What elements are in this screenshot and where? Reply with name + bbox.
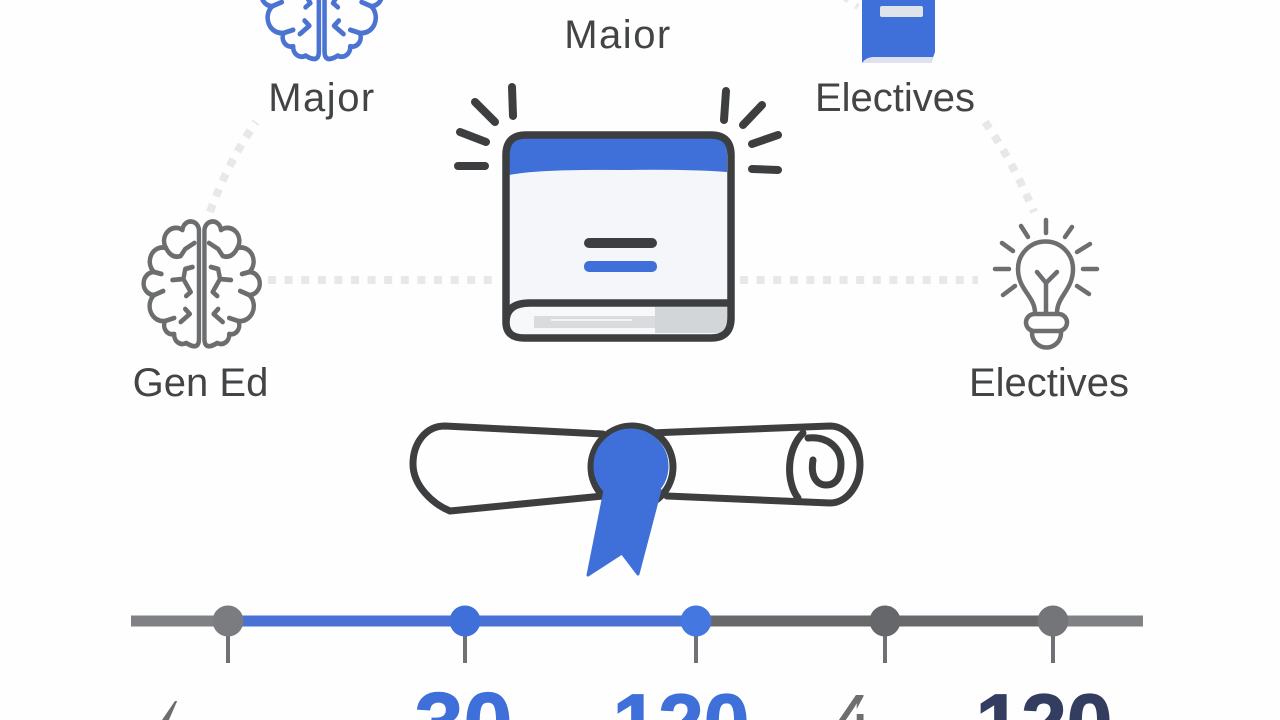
timeline <box>131 606 1143 663</box>
label: Major left: Major <box>268 76 376 120</box>
icon: blue book <box>862 0 935 63</box>
icon: central book <box>458 87 778 338</box>
book pages <box>509 306 727 335</box>
title lines <box>584 238 657 248</box>
timeline bar <box>131 616 1143 626</box>
book rays <box>458 87 778 170</box>
icon: light bulb <box>995 220 1097 348</box>
scroll outline <box>413 426 860 511</box>
milestone dots <box>212 606 244 636</box>
connector: dotted arcs and lines <box>210 0 1034 280</box>
label: Gen Ed: Gen Ed <box>133 361 268 405</box>
book outline <box>506 135 731 338</box>
label: Electives right: Electives <box>969 361 1129 405</box>
label: Electives top: Electives <box>815 76 975 120</box>
icon: diploma scroll <box>413 426 860 575</box>
icon: blue brain <box>261 0 382 59</box>
blue header band <box>509 138 727 175</box>
ticks <box>228 630 1053 663</box>
icon: gray brain <box>144 221 260 346</box>
ribbon seal <box>588 430 667 575</box>
book cover <box>506 134 732 338</box>
label: Maior center: Maior <box>564 13 672 57</box>
